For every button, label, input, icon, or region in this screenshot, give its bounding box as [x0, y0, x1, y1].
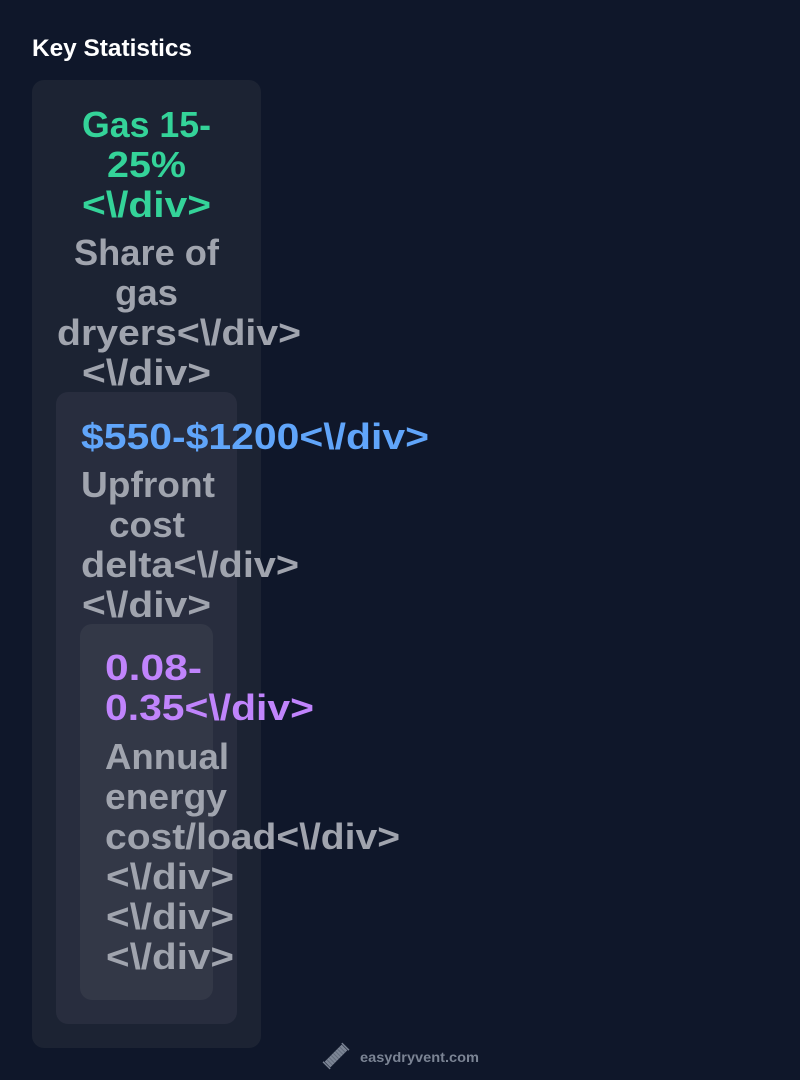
stat label: annual energy cost per load: <\/div> — [106, 856, 234, 897]
stat value: annual energy cost — [105, 647, 314, 728]
stat label: annual energy cost per load: cost/load<\/div> — [105, 816, 400, 857]
stat label: share of gas dryers: dryers<\/div> — [57, 312, 301, 353]
stat value: gas share — [82, 104, 211, 225]
stat value: upfront cost: $550-$1200<\/div> — [81, 416, 429, 457]
stat label: share of gas dryers — [57, 232, 301, 393]
footer logo: easydryvent — [323, 1043, 479, 1069]
icon: vent duct — [323, 1043, 349, 1069]
stat label: annual energy cost per load: <\/div> — [106, 896, 234, 937]
stat label: annual energy cost per load — [105, 736, 400, 977]
stat label: upfront cost delta: delta<\/div> — [81, 544, 299, 585]
stat label: upfront cost delta: cost — [109, 504, 185, 545]
stat value: gas share: Gas 15- — [82, 104, 211, 145]
stat value: annual energy cost: 0.35<\/div> — [105, 687, 314, 728]
brand name: easydryvent.com — [360, 1049, 479, 1065]
stat label: annual energy cost per load: Annual — [105, 736, 229, 777]
stat label: upfront cost delta: Upfront — [81, 464, 215, 505]
stat label: upfront cost delta: <\/div> — [82, 584, 211, 625]
panel: inner card — [80, 624, 400, 1000]
title: Key Statistics — [32, 35, 192, 62]
stat label: upfront cost delta — [81, 464, 299, 625]
panel: middle card — [56, 392, 429, 1024]
stat value: gas share: <\/div> — [82, 184, 211, 225]
stat label: share of gas dryers: gas — [115, 272, 178, 313]
stat label: share of gas dryers: <\/div> — [82, 352, 211, 393]
panel: outer card — [32, 80, 429, 1048]
stat label: annual energy cost per load: energy — [105, 776, 227, 817]
stat label: share of gas dryers: Share of — [74, 232, 220, 273]
stat label: annual energy cost per load: <\/div> — [106, 936, 234, 977]
stat value: annual energy cost: 0.08- — [105, 647, 202, 688]
stat value: gas share: 25% — [107, 144, 186, 185]
